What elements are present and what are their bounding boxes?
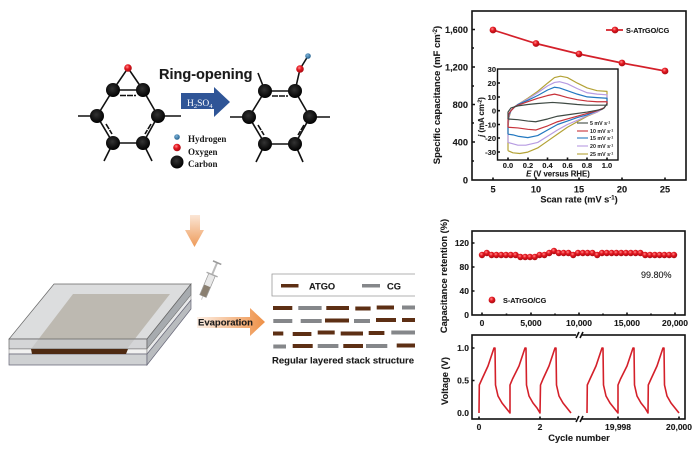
chart: capacitance retention over cycles: 80 [460,262,469,272]
inset chart: cyclic voltammetry curves: 30 [488,65,496,74]
inset chart: cyclic voltammetry curves: 20 [488,79,496,88]
inset chart: cyclic voltammetry curves: -2 [478,100,484,104]
panel: layered stack structure legend: ATGO [309,282,335,292]
chart legend: S-ATrGO/CG: S-ATrGO/CG [626,26,670,35]
inset legend: scan rates: -1 [610,128,613,132]
chart: specific capacitance vs scan rate: 25 [660,184,670,194]
chart legend: S-ATrGO/CG [606,26,670,35]
panel: layered stack structure legend [272,274,415,296]
CV curves at five scan rates [508,76,607,153]
icon: syringe [196,260,223,302]
chart: voltage vs cycle number: 0.0 [457,408,469,418]
chart: voltage vs cycle number: 0.5 [457,376,469,386]
inset chart: cyclic voltammetry curves: 0.8 [582,161,592,170]
inset chart: cyclic voltammetry curves: 0.4 [542,161,554,170]
inset legend: scan rates: 25 mV s [590,152,610,158]
chart: specific capacitance vs scan rate: Specific capacitance (mF cm [432,34,443,164]
chart: specific capacitance vs scan rate: 1,200 [445,62,468,72]
chart: specific capacitance vs scan rate: ) [615,194,618,204]
chart: voltage vs cycle number [440,332,692,443]
inset chart: cyclic voltammetry curves: 0 [492,106,496,116]
inset chart: cyclic voltammetry curves: 0.6 [562,161,573,170]
inset chart: cyclic voltammetry curves: 0.2 [523,161,533,170]
retention data points [479,248,677,260]
chart: voltage vs cycle number: 0 [477,422,482,432]
inset legend: scan rates [577,120,613,158]
inset legend: scan rates: -1 [610,136,613,140]
chart: specific capacitance vs scan rate: 800 [453,100,468,110]
chart: capacitance retention over cycles: 120 [455,238,469,248]
inset legend: scan rates: 20 mV s [590,144,610,150]
panel: glass mould device [9,284,191,365]
inset legend: scan rates: -1 [607,120,610,124]
chart: capacitance retention over cycles: 15,000 [614,318,640,328]
arrow: H2SO4 reaction [181,87,230,117]
caption: regular layered stack structure: Regular layered stack structure [272,356,414,366]
inset legend: scan rates: 15 mV s [590,136,610,142]
chart: specific capacitance vs scan rate: -2 [433,28,439,34]
inset chart: cyclic voltammetry curves: E (V versus RHE) [526,170,590,178]
inset legend: scan rates: 10 mV s [590,129,610,135]
chart: capacitance retention over cycles: 0 [480,318,485,328]
chart: capacitance retention over cycles: 0 [464,310,469,320]
chart: capacitance retention over cycles: 5,000 [520,318,542,328]
right molecule: opened ring with hydroxyl [230,53,330,162]
brown ATGO film [31,349,128,354]
panel: layered stack structure legend: CG [387,282,401,292]
chart: specific capacitance vs scan rate: -1 [609,196,615,202]
inset chart: cyclic voltammetry curves: -20 [485,134,496,143]
arrow: H2SO4 reaction: 4 [209,103,213,110]
chart: capacitance retention over cycles [439,219,688,333]
chart: specific capacitance vs scan rate: 15 [574,184,584,194]
chart legend: S-ATrGO/CG: S-ATrGO/CG [503,296,547,305]
chart: capacitance retention over cycles: Capacitance retention (%) [439,219,449,333]
inset chart: cyclic voltammetry curves [477,65,618,178]
inset chart: cyclic voltammetry curves: -10 [485,120,496,130]
atom legend: Hydrogen [188,134,226,144]
chart: specific capacitance vs scan rate: 20 [617,184,627,194]
chart: voltage vs cycle number: 19,998 [605,422,631,432]
inset chart: cyclic voltammetry curves: ) [477,97,486,100]
panel: ring-opening chemistry scheme [78,53,330,169]
inset legend: scan rates: -1 [610,152,613,156]
chart: voltage vs cycle number: 2 [538,422,543,432]
chart: specific capacitance vs scan rate: 5 [490,184,496,194]
arrow: H2SO4 reaction: H [187,99,194,109]
heading: Ring-opening: Ring-opening [159,67,252,83]
atom legend: Oxygen [188,147,218,157]
chart: specific capacitance vs scan rate: 400 [453,138,468,148]
chart: voltage vs cycle number: 1.0 [457,343,469,353]
arrow: H2SO4 reaction: SO [197,99,209,109]
axis break marks [576,332,583,422]
chart: voltage vs cycle number: Voltage (V) [440,357,450,405]
chart: voltage vs cycle number: Cycle number [548,433,610,443]
chart: specific capacitance vs scan rate: 10 [531,184,541,194]
inset legend: scan rates: -1 [610,144,613,148]
chart: voltage vs cycle number: 20,000 [666,422,692,432]
atom legend [170,134,226,169]
chart: capacitance retention over cycles: 20,000 [662,318,688,328]
inset chart: cyclic voltammetry curves: j (mA cm [477,104,486,137]
left molecule: epoxide on carbon ring [78,64,181,161]
chart: specific capacitance vs scan rate: ) [432,26,443,29]
inset chart: cyclic voltammetry curves: 1.0 [602,161,612,170]
inset legend: scan rates: 5 mV s [590,121,607,127]
inset chart: cyclic voltammetry curves: -30 [485,148,496,157]
annotation: 99.80%: 99.80% [641,270,672,280]
atom legend: Carbon [188,159,218,169]
chart: capacitance retention over cycles: 40 [460,286,469,296]
chart: specific capacitance vs scan rate [432,11,686,204]
chart: specific capacitance vs scan rate: Scan rate (mV s [540,194,609,204]
arrow: Evaporation: Evaporation [198,318,253,328]
chart: specific capacitance vs scan rate: 0 [463,176,468,186]
arrow: H2SO4 reaction: 2 [194,103,197,110]
chart: specific capacitance vs scan rate: 1,600 [445,25,468,35]
arrow: Evaporation [197,308,265,336]
inset chart: cyclic voltammetry curves: 10 [488,93,496,102]
layered stack of ATGO and CG sheets [273,306,415,348]
charge-discharge curves [479,348,679,413]
inset chart: cyclic voltammetry curves: 0.0 [503,161,513,170]
arrow: downward orange [185,215,204,247]
chart: capacitance retention over cycles: 10,000 [566,318,592,328]
